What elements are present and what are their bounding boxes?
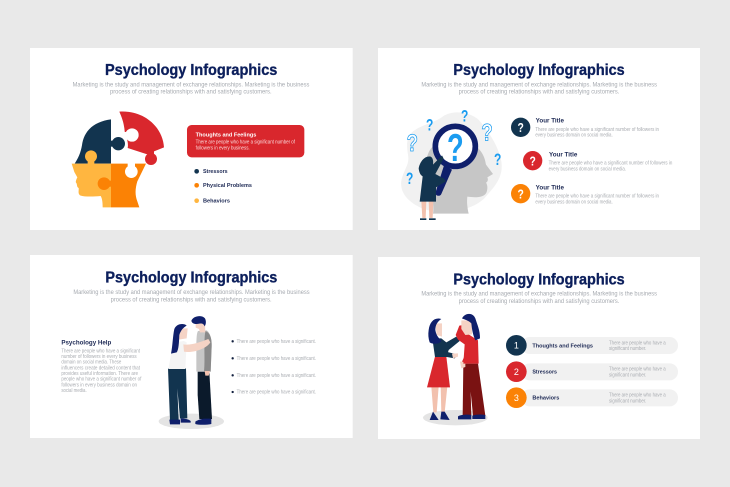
item: second title: ? [529, 153, 536, 168]
panel: numbered list [378, 257, 700, 439]
text block: psychology help: number of followers in every business [61, 354, 137, 360]
figure: woman [419, 155, 446, 220]
item: first title: There are people who have a significant number of followers in [535, 127, 659, 133]
icon: puzzle head [72, 112, 164, 207]
row: stressors: 2 [514, 367, 519, 377]
subtitle [73, 81, 310, 96]
item: third title: every business domain on social media. [535, 199, 613, 205]
legend: stressors: Stressors [203, 169, 228, 175]
row: stressors: significant number. [609, 372, 646, 378]
subtitle: process of creating relationships with and satisfying customers. [110, 89, 272, 96]
text block: psychology help: There are people who have a significant [61, 348, 140, 354]
bullet list: There are people who have a significant. [237, 356, 316, 362]
row: thoughts and feelings [506, 335, 678, 356]
legend: behaviors: Behaviors [203, 198, 230, 204]
legend: physical problems: Physical Problems [203, 183, 252, 189]
subtitle: process of creating relationships with and satisfying customers. [459, 298, 619, 305]
illustration: two women [423, 314, 488, 425]
text block: psychology help: provides useful information. There are [61, 371, 138, 377]
subtitle [421, 81, 658, 96]
question marks: ? [426, 115, 433, 134]
figure: woman in red skirt [427, 319, 460, 420]
title: Psychology Infographics [105, 270, 278, 287]
text block: psychology help [61, 340, 142, 394]
figure: woman [168, 324, 210, 424]
item: first title: Your Title [536, 118, 564, 125]
bullet list [231, 339, 316, 396]
item: second title: Your Title [549, 151, 578, 158]
figure: man [191, 316, 212, 425]
question marks: ? [481, 120, 493, 147]
text block: psychology help: people who have a significant number of [61, 377, 142, 383]
item: first title [511, 118, 659, 139]
row: behaviors: Behaviors [532, 395, 559, 401]
subtitle: process of creating relationships with and satisfying customers. [111, 296, 272, 303]
question marks: ? [406, 169, 413, 188]
row: thoughts and feelings: There are people who have a [609, 340, 666, 346]
text block: psychology help: social media. [61, 388, 87, 394]
item: third title: There are people who have a significant number of followers in [535, 194, 659, 200]
item: third title: ? [517, 186, 524, 201]
subtitle: Marketing is the study and management of exchange relationships. Marketing is the business [421, 291, 658, 298]
row: stressors: Stressors [532, 370, 557, 376]
item: second title [523, 151, 672, 172]
bullet list: There are people who have a significant. [237, 339, 316, 345]
panel: magnifier [378, 48, 700, 230]
bullet list: There are people who have a significant. [237, 390, 316, 396]
text block: psychology help: followers in every business domain on [61, 382, 137, 388]
subtitle [421, 291, 658, 305]
item: third title: Your Title [536, 184, 564, 191]
callout: thoughts and feelings: Thoughts and Feelings [196, 133, 256, 139]
question marks: ? [494, 150, 501, 169]
row: behaviors: 3 [514, 393, 519, 403]
question marks: ? [407, 130, 418, 157]
row: behaviors: There are people who have a [609, 393, 666, 399]
row: behaviors [506, 387, 678, 408]
question marks [406, 106, 501, 188]
row: stressors: There are people who have a [609, 367, 666, 373]
row: thoughts and feelings: Thoughts and Feelings [532, 343, 593, 349]
item: first title: ? [517, 120, 524, 135]
text block: psychology help: influencers create detailed content that [61, 365, 140, 371]
panel: puzzle head [30, 48, 353, 230]
subtitle [73, 289, 310, 303]
title: Psychology Infographics [105, 62, 278, 79]
row: behaviors: significant number. [609, 398, 646, 404]
text block: psychology help: Psychology Help [61, 340, 111, 347]
item: second title: every business domain on social media. [549, 166, 626, 172]
question marks: ? [461, 106, 468, 125]
row: thoughts and feelings: 1 [514, 341, 519, 351]
row: thoughts and feelings: significant number. [609, 346, 646, 352]
callout: thoughts and feelings: There are people who have a significant number of [196, 140, 295, 146]
subtitle: Marketing is the study and management of exchange relationships. Marketing is the business [421, 81, 658, 88]
item: third title [511, 184, 659, 205]
panel: psychology help [30, 255, 353, 438]
row: stressors [506, 361, 678, 382]
subtitle: Marketing is the study and management of exchange relationships. Marketing is the business [73, 81, 310, 88]
item: first title: every business domain on social media. [535, 133, 613, 139]
illustration: head under magnifier [401, 106, 502, 220]
illustration: couple hugging [159, 316, 224, 429]
callout: thoughts and feelings [187, 125, 304, 157]
title: Psychology Infographics [453, 271, 625, 288]
bullet list: There are people who have a significant. [237, 373, 316, 379]
callout: thoughts and feelings: followers in every business. [196, 145, 250, 151]
text block: psychology help: domain on social media. These [61, 360, 121, 366]
figure: woman in burgundy trousers [456, 314, 485, 419]
item: second title: There are people who have a significant number of followers in [549, 161, 672, 167]
icon: magnifier: ? [447, 126, 464, 170]
title: Psychology Infographics [453, 62, 625, 79]
subtitle: process of creating relationships with and satisfying customers. [459, 89, 619, 96]
subtitle: Marketing is the study and management of exchange relationships. Marketing is the business [73, 289, 310, 296]
